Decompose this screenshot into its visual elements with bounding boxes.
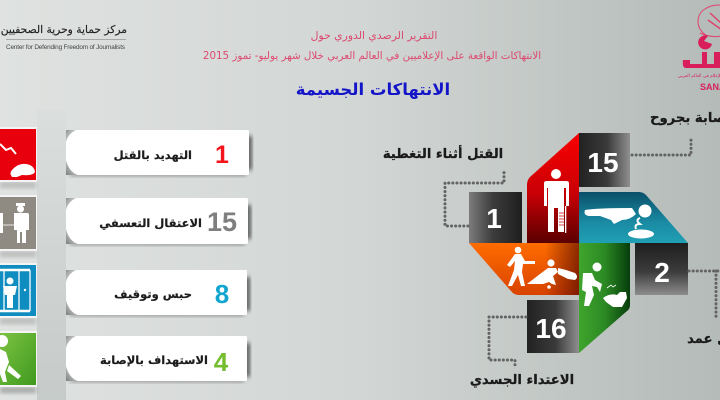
card: death threats: التهديد بالقتل	[114, 148, 192, 162]
connectors	[445, 140, 720, 365]
box: wounded count	[579, 133, 630, 187]
title: الانتهاكات الجسيمة	[296, 80, 450, 100]
box: physical assault count	[527, 300, 579, 353]
panel: teal fold with lying man icon	[579, 192, 688, 243]
card: targeted injury	[66, 336, 250, 382]
logo: Center for Defending Freedom of Journalists: Center for Defending Freedom of Journalists	[6, 44, 125, 51]
card: imprisonment	[66, 270, 250, 316]
card: imprisonment: 8	[215, 279, 229, 309]
logo: Center for Defending Freedom of Journalists: مركز حماية وحرية الصحفيين	[1, 23, 127, 36]
box: willful killing count	[635, 243, 688, 295]
card: targeted injury: 4	[214, 347, 229, 377]
card: death threats	[66, 130, 252, 176]
box: willful killing count: 2	[654, 257, 670, 288]
icon: arbitrary detention	[0, 195, 37, 257]
logo: Sanad	[678, 5, 720, 92]
card: death threats: 1	[215, 141, 229, 169]
icon: targeted injury	[0, 331, 37, 393]
report heading	[203, 29, 541, 62]
box: physical assault count: 16	[535, 313, 567, 344]
panel: statistic cards	[66, 130, 252, 382]
card: imprisonment: حبس وتوقيف	[114, 287, 192, 302]
icon: imprisonment	[0, 263, 37, 324]
panel: red fold with standing man icon	[527, 133, 579, 243]
logo: Center for Defending Freedom of Journalists	[1, 23, 127, 51]
panel: left icons	[0, 127, 37, 393]
chart: pinwheel	[469, 133, 688, 353]
card: arbitrary detention: 15	[207, 207, 237, 237]
box: killed during coverage count	[469, 192, 522, 243]
box: wounded count: 15	[587, 147, 619, 178]
label: killed during coverage: القتل أثناء التغطية	[383, 145, 503, 162]
card: arbitrary detention	[66, 198, 251, 245]
icon: death threat	[0, 127, 37, 188]
card: arbitrary detention: الاعتقال التعسفي	[99, 216, 202, 230]
box: killed during coverage count: 1	[486, 203, 502, 234]
panel: orange fold with shooting icon	[469, 243, 579, 295]
report heading: التقرير الرصدي الدوري حول	[311, 29, 437, 42]
card: targeted injury: الاستهداف بالإصابة	[100, 353, 208, 367]
report heading: الانتهاكات الواقعة على الإعلاميين في العالم العربي خلال شهر يوليو- تموز 2015	[203, 50, 541, 62]
label: physical assault: الاعتداء الجسدي	[470, 373, 574, 388]
panel: green fold with assault icon	[579, 243, 630, 353]
